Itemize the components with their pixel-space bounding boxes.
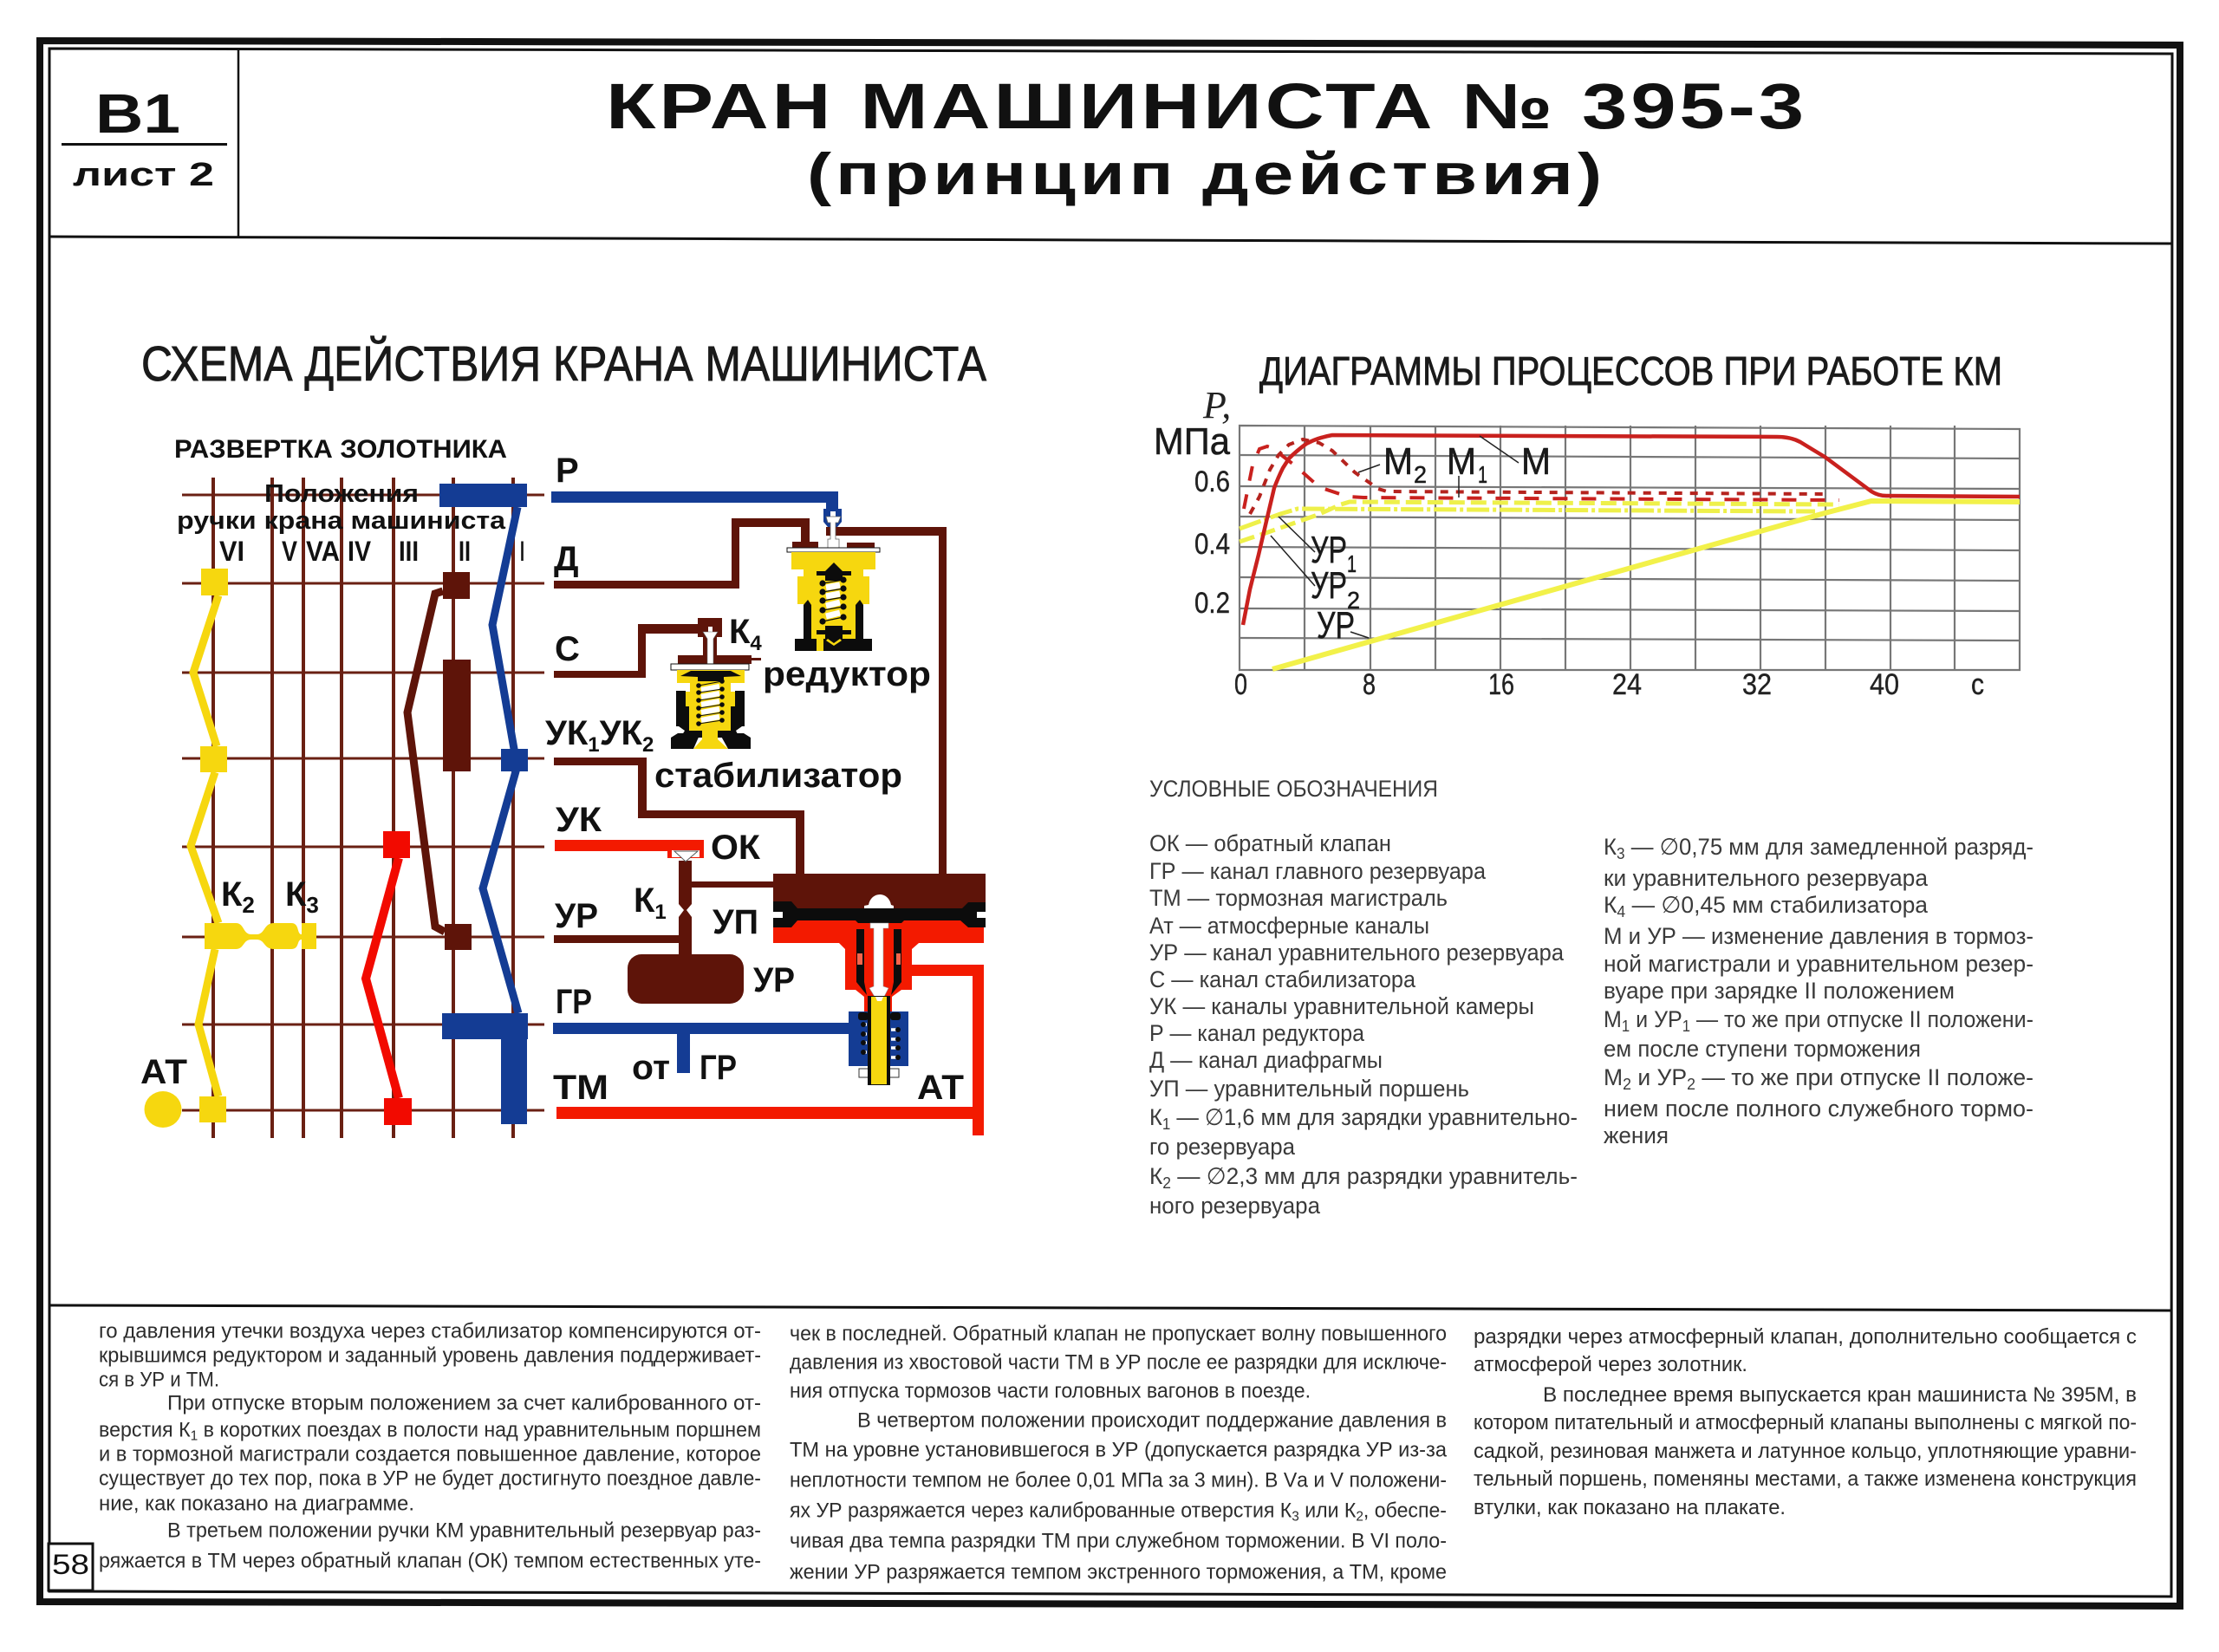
channel labels: УК (556, 801, 602, 839)
text column 2: чивая два темпа разрядки ТМ при служебном торможении. В VI поло- (790, 1529, 1447, 1553)
blue spool connections (439, 484, 528, 1124)
y axis labels: 0.2 (1194, 587, 1230, 620)
text column 1: ряжается в ТМ через обратный клапан (ОК) темпом естественных уте- (99, 1550, 761, 1572)
x axis labels (1234, 668, 1984, 701)
channel labels: 2 (642, 733, 654, 757)
channel labels: С (555, 630, 580, 668)
spool grid (182, 478, 544, 1138)
position numerals: V (282, 536, 298, 567)
chart grid (1240, 426, 2020, 670)
legend left column: ОК — обратный клапан (1149, 830, 1391, 856)
legend right column (1604, 834, 2034, 1148)
handle positions caption: Положения (264, 480, 419, 508)
legend left column: го резервуара (1149, 1134, 1296, 1160)
red spool connections (366, 831, 412, 1125)
text column 3: втулки, как показано на плакате. (1474, 1496, 1786, 1519)
curve labels: 2 (1347, 587, 1360, 614)
legend right column: — ∅0,45 мм стабилизатора (1625, 892, 1929, 918)
label: atmosphere port (140, 1053, 187, 1128)
red channels (555, 840, 984, 1135)
chart: process diagrams (1154, 384, 2020, 701)
page number: 58 (52, 1549, 89, 1580)
channel labels: 1 (588, 733, 600, 757)
channel labels: 4 (750, 632, 762, 655)
text column 1: 1 (191, 1428, 198, 1444)
title: КРАН МАШИНИСТА № 395-3 (606, 70, 1807, 142)
legend left column: УР — канал уравнительного резервуара (1149, 940, 1565, 966)
legend right column: и УР (1630, 1006, 1682, 1032)
equalizing piston (773, 874, 986, 1011)
curve labels: М (1521, 440, 1551, 483)
position numerals (219, 536, 524, 567)
channel labels: К (634, 881, 654, 920)
channel labels: ОК (711, 829, 761, 867)
legend right column: вуаре при зарядке II положением (1604, 978, 1955, 1004)
text column 2: чек в последней. Обратный клапан не пропускает волну повышенного (790, 1323, 1447, 1345)
legend heading: УСЛОВНЫЕ ОБОЗНАЧЕНИЯ (1149, 776, 1438, 802)
x axis labels: 8 (1363, 668, 1376, 701)
legend (1149, 776, 2034, 1219)
spool heading: РАЗВЕРТКА ЗОЛОТНИКА (174, 435, 507, 464)
legend right column: 2 (1687, 1076, 1695, 1093)
legend right column: 1 (1622, 1018, 1630, 1035)
legend left column: ГР — канал главного резервуара (1149, 858, 1487, 884)
text column 2: жении УР разряжается темпом экстренного торможения, а ТМ, кроме (790, 1560, 1447, 1584)
blue channels (551, 491, 849, 1073)
text column 2: 2 (1356, 1510, 1363, 1524)
heading: diagrams: ДИАГРАММЫ ПРОЦЕССОВ ПРИ РАБОТЕ КМ (1259, 348, 2002, 393)
curve labels: УР (1317, 604, 1355, 647)
text column 1: го давления утечки воздуха через стабилизатор компенсируются от- (99, 1319, 761, 1343)
legend right column: — то же при отпуске II положени- (1690, 1006, 2034, 1032)
legend left column: Ат — атмосферные каналы (1149, 913, 1429, 939)
x axis labels: 32 (1742, 668, 1772, 701)
legend right column: — то же при отпуске II положе- (1695, 1064, 2034, 1090)
legend right column: 3 (1617, 845, 1625, 862)
legend left column: УК — каналы уравнительной камеры (1149, 993, 1534, 1019)
y axis labels (1154, 384, 1231, 620)
channel labels: Р (556, 452, 579, 490)
x axis labels: с (1971, 668, 1984, 701)
text column 2: ях УР разряжается через калиброванные отверстия К (790, 1499, 1311, 1522)
curve UR1 (1240, 502, 1839, 542)
y axis labels: P, (1202, 384, 1231, 426)
check valve OK (672, 850, 700, 862)
yellow spool connections (191, 569, 316, 1122)
text column 3: разрядки через атмосферный клапан, дополнительно сообщается с (1474, 1325, 2137, 1349)
channel labels: К (729, 613, 750, 651)
legend right column: жения (1604, 1122, 1669, 1148)
legend right column: М (1604, 1006, 1623, 1032)
curve M2 (1250, 439, 1825, 514)
curve UR2 (1240, 509, 1815, 529)
channel labels: стабилизатор (654, 757, 902, 795)
channel labels: УК (545, 714, 588, 752)
text column 3: котором питательный и атмосферный клапаны выполнены с мягкой по- (1474, 1411, 2137, 1434)
channel labels: УП (713, 903, 758, 941)
y axis labels: МПа (1154, 420, 1231, 463)
legend left column: ТМ — тормозная магистраль (1149, 885, 1448, 911)
text column 1: в коротких поездах в полости над уравнительным поршнем (198, 1418, 761, 1442)
stabilizer valve (671, 618, 761, 749)
heading: schematic: СХЕМА ДЕЙСТВИЯ КРАНА МАШИНИСТА (141, 335, 986, 392)
text column 1: ние, как показано на диаграмме. (99, 1493, 414, 1515)
position numerals: III (399, 536, 419, 567)
labels: orifices K2 K3: К (285, 875, 306, 914)
channel labels: УК (600, 714, 643, 752)
legend right column: 1 (1682, 1018, 1690, 1035)
sheet badge: В1 (95, 82, 180, 145)
text column 3: В последнее время выпускается кран машиниста № 395М, в (1543, 1383, 2137, 1407)
legend right column: К (1604, 892, 1617, 918)
page number (49, 1544, 93, 1590)
text column 1: При отпуске вторым положением за счет калиброванного от- (167, 1392, 761, 1415)
legend right column: 2 (1623, 1076, 1631, 1093)
panel: spool development chart (140, 435, 544, 1138)
x axis labels: 0 (1234, 668, 1247, 701)
legend right column: ной магистрали и уравнительном резер- (1604, 951, 2034, 977)
label: atmosphere port: АТ (140, 1053, 187, 1091)
channel labels: редуктор (763, 655, 931, 693)
panel: pneumatic scheme (545, 452, 986, 1135)
reducer valve (787, 503, 880, 651)
curve UR (1272, 501, 2020, 669)
text column 1: верстия К (99, 1418, 193, 1442)
curve labels (1311, 440, 1551, 647)
position numerals: IV (348, 536, 372, 567)
text column 2: давления из хвостовой части ТМ в УР после ее разрядки для исключе- (790, 1350, 1447, 1375)
legend left column: 2 (1162, 1174, 1171, 1192)
brown channels (554, 518, 947, 1004)
legend left column: Д — канал диафрагмы (1149, 1047, 1383, 1073)
legend left column: УП — уравнительный поршень (1149, 1076, 1469, 1102)
y axis labels: 0.4 (1194, 528, 1230, 561)
text column 2: ТМ на уровне установившегося в УР (допускается разрядка УР из-за (790, 1439, 1448, 1461)
curve labels: 2 (1414, 461, 1427, 488)
y axis labels: 0.6 (1194, 465, 1230, 498)
curve M (1243, 435, 2020, 625)
legend left column: К (1149, 1104, 1163, 1130)
text column 3: садкой, резиновая манжета и латунное кольцо, уплотняющие уравни- (1474, 1440, 2137, 1463)
curve labels: 1 (1478, 461, 1487, 488)
legend right column: 4 (1617, 903, 1625, 920)
handle positions caption (177, 480, 506, 535)
x axis labels: 40 (1870, 668, 1899, 701)
legend left column: ного резервуара (1149, 1193, 1321, 1219)
position numerals: VA (306, 536, 340, 567)
text column 1: В третьем положении ручки КМ уравнительный резервуар раз- (167, 1519, 761, 1543)
labels: orifices K2 K3: 2 (242, 892, 255, 918)
legend right column: и УР (1631, 1064, 1687, 1090)
text column 2: В четвертом положении происходит поддержание давления в (857, 1409, 1447, 1432)
position numerals: I (520, 536, 524, 567)
legend right column: ки уравнительного резервуара (1604, 865, 1929, 891)
text column 2: неплотности темпом не более 0,01 МПа за 3 мин). В Vа и V положени- (790, 1468, 1447, 1493)
legend left column: 1 (1162, 1115, 1170, 1133)
text column 2: 3 (1292, 1510, 1299, 1524)
curve labels: 1 (1347, 550, 1357, 577)
curve labels: УР (1311, 564, 1347, 607)
text column 2: или К (1299, 1499, 1356, 1522)
text column 1: и в тормозной магистрали создается повышенное давление, которое (99, 1442, 761, 1467)
channel labels: УР (753, 961, 795, 999)
channel labels (545, 452, 964, 1107)
feed valve (849, 996, 908, 1085)
labels: orifices K2 K3: 3 (306, 892, 319, 918)
legend right column: ем после ступени торможения (1604, 1036, 1921, 1062)
channel labels: ГР (556, 983, 592, 1021)
text column 3 (1474, 1325, 2137, 1519)
text column 2 (790, 1323, 1448, 1584)
text column 2: , обеспе- (1363, 1499, 1447, 1522)
text column 1: крывшимся редуктором и заданный уровень давления поддерживает- (99, 1343, 761, 1368)
curve labels: М (1383, 440, 1413, 483)
legend right column: К (1604, 834, 1617, 860)
text column 1 (99, 1319, 761, 1572)
channel labels: УР (555, 897, 598, 935)
legend left column: — ∅1,6 мм для зарядки уравнительно- (1170, 1104, 1578, 1130)
legend left column: Р — канал редуктора (1149, 1020, 1365, 1046)
legend right column: М (1604, 1064, 1623, 1090)
x axis labels: 24 (1612, 668, 1642, 701)
legend left column: — ∅2,3 мм для разрядки уравнитель- (1171, 1163, 1578, 1189)
position numerals: VI (219, 536, 244, 567)
legend right column: М и УР — изменение давления в тормоз- (1604, 923, 2034, 949)
sheet badge (62, 82, 227, 193)
legend right column: — ∅0,75 мм для замедленной разряд- (1625, 834, 2034, 860)
legend left column (1149, 830, 1578, 1219)
channel labels: ТМ (553, 1069, 608, 1107)
channel labels: от (632, 1049, 670, 1087)
labels: orifices K2 K3 (221, 875, 319, 918)
title: (принцип действия) (807, 141, 1606, 207)
sheet badge: лист 2 (73, 157, 214, 193)
legend left column: К (1149, 1163, 1163, 1189)
x axis labels: 16 (1488, 668, 1514, 701)
text column 1: ся в УР и ТМ. (99, 1368, 219, 1392)
legend left column: С — канал стабилизатора (1149, 966, 1416, 992)
curve M1 (1244, 446, 1839, 509)
text column 3: атмосферой через золотник. (1474, 1353, 1747, 1376)
brown spool connections (407, 572, 472, 950)
curve labels: М (1447, 440, 1476, 483)
text column 2: ния отпуска тормозов части головных вагонов в поезде. (790, 1380, 1311, 1402)
position numerals: II (459, 536, 471, 567)
title (606, 70, 1807, 207)
channel labels: Д (554, 540, 579, 578)
leader lines (1271, 436, 1519, 638)
text column 3: тельный поршень, поменяны местами, а также изменена конструкция (1474, 1467, 2137, 1491)
handle positions caption: ручки крана машиниста (177, 507, 506, 535)
curve labels: УР (1311, 529, 1347, 571)
channel labels: АТ (917, 1069, 964, 1107)
text column 1: существует до тех пор, пока в УР не будет достигнуто поездное давле- (99, 1467, 761, 1491)
channel labels: ГР (700, 1049, 737, 1087)
channel labels: 1 (654, 901, 667, 924)
legend right column: нием после полного служебного тормо- (1604, 1096, 2034, 1122)
labels: orifices K2 K3: К (221, 875, 242, 914)
